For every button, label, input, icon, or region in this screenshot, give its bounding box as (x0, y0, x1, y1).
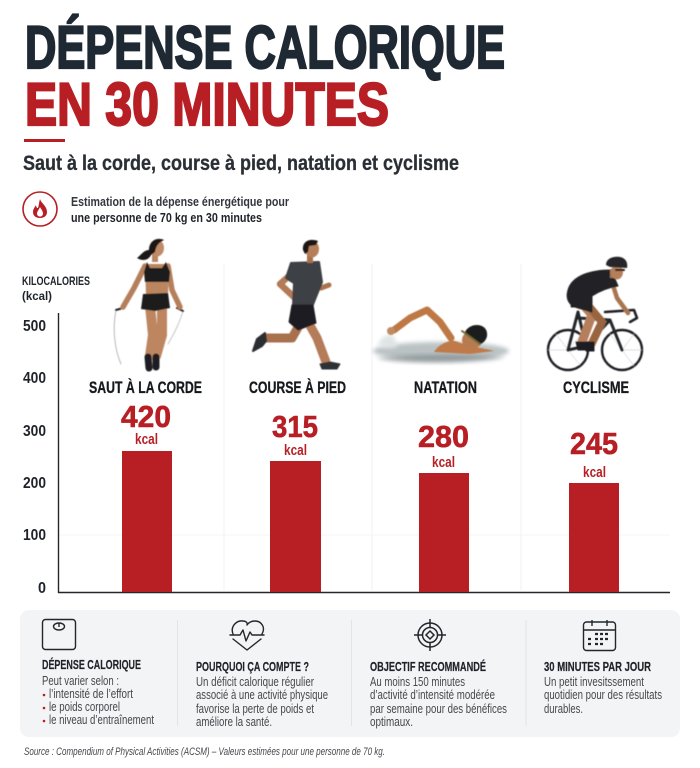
note: dépense calorique: l’intensité de l’effort (49, 687, 133, 701)
note: dépense calorique: le poids corporel (49, 700, 120, 714)
title: EN 30 MINUTES (25, 71, 389, 138)
illustration: swimmer (373, 310, 509, 363)
illustration: runner (253, 240, 340, 369)
icon: target (414, 619, 446, 651)
bar: cyclisme: kcal (583, 464, 606, 481)
y axis title: (kcal) (22, 289, 52, 303)
note: dépense calorique: Peut varier selon : (42, 674, 119, 688)
note: objectif recommandé: optimaux. (370, 715, 413, 729)
bar: course à pied: COURSE À PIED (249, 378, 346, 397)
y axis title (22, 274, 90, 303)
bar: natation: kcal (432, 454, 455, 471)
title (25, 14, 505, 138)
icon: heart (230, 621, 264, 650)
note: 30 minutes par jour: Un petit invesitssement (544, 675, 644, 689)
note: pourquoi ça compte: Un déficit calorique régulier (196, 675, 314, 689)
illustration: cyclist (548, 257, 642, 370)
note: pourquoi ça compte: associé à une activité physique (196, 688, 328, 702)
note: dépense calorique: le niveau d’entraînement (49, 713, 154, 727)
note: objectif recommandé: Au moins 150 minutes (370, 675, 465, 689)
bar: course à pied: 315 (272, 409, 318, 444)
note: 30 minutes par jour (544, 659, 662, 716)
intro text: une personne de 70 kg en 30 minutes (71, 211, 262, 225)
note: pourquoi ça compte: améliore la santé. (196, 715, 272, 729)
illustration: rope jumper (114, 239, 183, 368)
bar: natation: NATATION (414, 379, 477, 397)
note: dépense calorique (42, 657, 154, 727)
note: objectif recommandé (370, 659, 507, 729)
subtitle: Saut à la corde, course à pied, natation et cyclisme (23, 152, 459, 175)
bar: course à pied: kcal (284, 442, 307, 459)
title accent rule (24, 139, 65, 142)
intro text (71, 195, 289, 225)
bar: cyclisme: 245 (570, 426, 618, 461)
title: DÉPENSE CALORIQUE (25, 14, 505, 81)
icon: scale (42, 620, 76, 650)
chart (22, 264, 670, 597)
note: 30 minutes par jour: 30 MINUTES PAR JOUR (544, 659, 651, 674)
note: dépense calorique: DÉPENSE CALORIQUE (42, 657, 141, 672)
y axis labels: 400 (23, 370, 46, 387)
note: pourquoi ça compte: POURQUOI ÇA COMPTE ? (196, 659, 309, 674)
bar: natation (414, 379, 477, 592)
y axis labels: 200 (23, 475, 46, 492)
icon: calendar (584, 620, 616, 650)
note: pourquoi ça compte: favorise la perte de poids et (196, 702, 314, 716)
x axis line (58, 592, 670, 594)
y axis labels: 300 (23, 423, 46, 440)
panel: notes (20, 610, 680, 737)
bar: saut à la corde: kcal (135, 431, 158, 448)
source: Source : Compendium of Physical Activities (ACSM) – Valeurs estimées pour une personne de 70 kg. (24, 746, 385, 758)
bar: cyclisme: CYCLISME (563, 379, 629, 397)
note: objectif recommandé: par semaine pour des bénéfices (370, 702, 507, 716)
bar: saut à la corde: 420 (121, 399, 171, 434)
y axis line (58, 313, 60, 593)
note: 30 minutes par jour: quotidien pour des résultats (544, 688, 662, 702)
y axis labels: 100 (23, 527, 46, 544)
note: objectif recommandé: d’activité d’intensité modérée (370, 688, 495, 702)
note: pourquoi ça compte (196, 659, 328, 729)
bar: course à pied (249, 378, 346, 592)
y axis title: KILOCALORIES (22, 274, 90, 288)
y axis labels (23, 318, 46, 597)
y axis labels: 0 (38, 580, 46, 597)
note: objectif recommandé: OBJECTIF RECOMMANDÉ (370, 659, 486, 674)
bar: saut à la corde (89, 378, 202, 592)
bar: cyclisme (563, 379, 629, 592)
bar: saut à la corde: SAUT À LA CORDE (89, 378, 202, 397)
note: 30 minutes par jour: durables. (544, 702, 583, 716)
bar: natation: 280 (418, 419, 469, 454)
intro text: Estimation de la dépense énergétique pour (71, 195, 289, 209)
icon: flame (23, 192, 57, 226)
y axis labels: 500 (23, 318, 46, 335)
